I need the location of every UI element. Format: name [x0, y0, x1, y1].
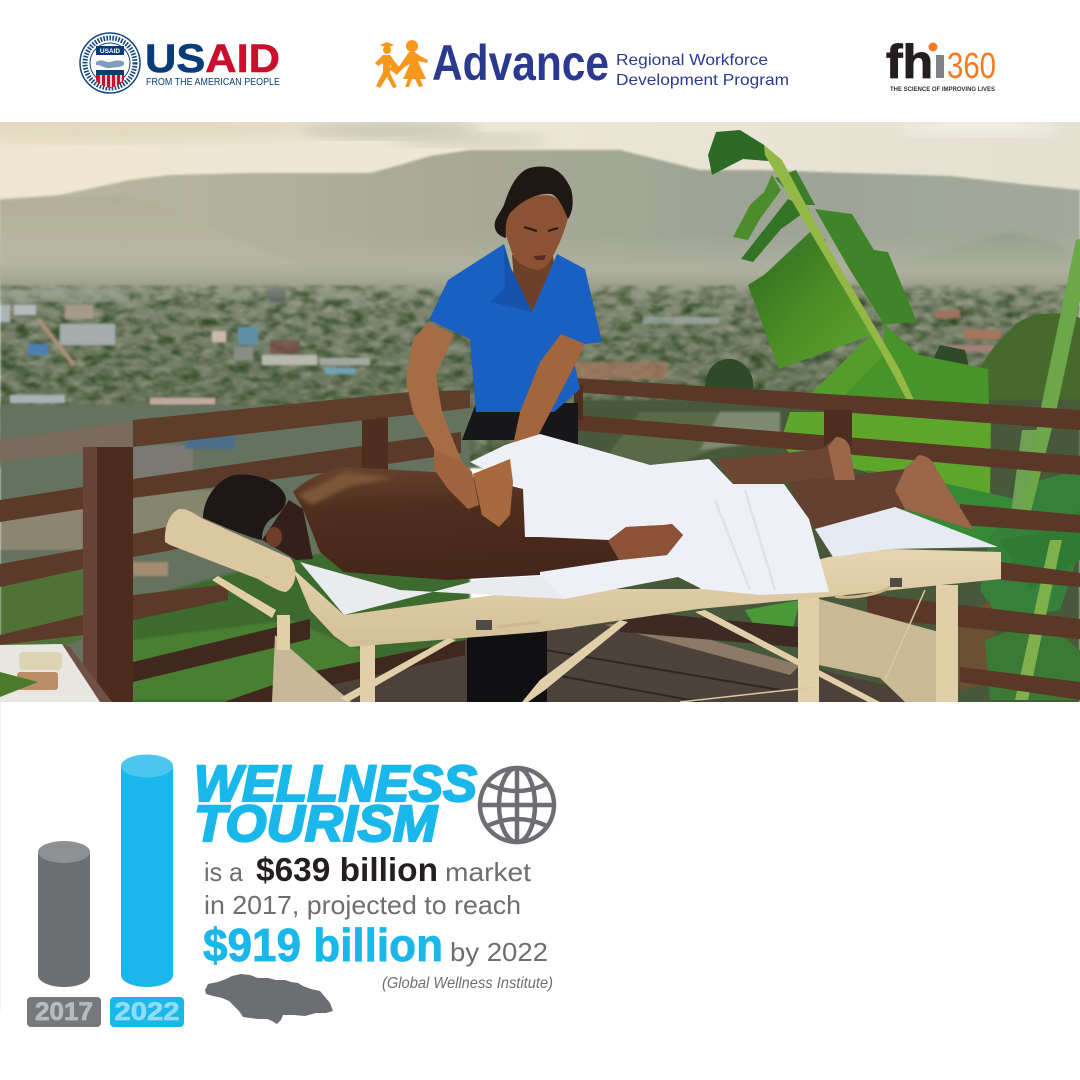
USAID wordmark: USAID [145, 37, 280, 81]
label 2022: 2022 [114, 998, 180, 1026]
table side rail and frame [212, 549, 1001, 702]
face [505, 195, 568, 270]
client head [203, 475, 313, 560]
orange dot [928, 42, 938, 52]
therapist left arm [406, 322, 473, 476]
gray i stem [936, 55, 944, 78]
line 1: $639 billion [256, 851, 438, 888]
source: (Global Wellness Institute) [382, 975, 553, 992]
line 1 [204, 851, 532, 888]
trousers [462, 403, 578, 445]
client torso and arm [293, 467, 683, 580]
USAID tagline: FROM THE AMERICAN PEOPLE [146, 77, 280, 88]
near left mountain [0, 197, 80, 251]
fhi tagline: THE SCIENCE OF IMPROVING LIVES [890, 86, 996, 93]
icon: globe [480, 768, 554, 842]
face cradle [165, 509, 296, 592]
bar chart: 2017 vs 2022 [27, 754, 184, 1027]
therapist right arm [473, 334, 585, 486]
360 numerals: 360 [947, 45, 996, 86]
draped white towel [470, 434, 829, 599]
logo: fhi360 [886, 35, 996, 93]
lower banana foliage [745, 239, 1080, 700]
table body [293, 549, 1001, 647]
side table with soap [0, 644, 112, 702]
table handles [497, 583, 895, 627]
photo: massage on terrace overlooking city [0, 114, 1080, 705]
header logos [80, 33, 996, 93]
line 3: $919 billion [203, 919, 443, 971]
fhi letters: fh [886, 35, 933, 88]
bar 2017 [38, 841, 90, 987]
logo: Advance [375, 35, 789, 91]
USAID seal [80, 33, 140, 93]
line 1: market [445, 857, 532, 887]
heading: wellness tourism: WELLNESS [194, 755, 477, 812]
banana leaf [708, 130, 989, 407]
ropes [680, 590, 925, 702]
hair [495, 167, 573, 238]
terrace deck [224, 620, 960, 702]
line 1: is a [204, 857, 244, 887]
bar 2022 [121, 754, 173, 987]
neck [512, 254, 554, 312]
therapist hands on back [434, 449, 513, 527]
program name [616, 52, 789, 89]
panel right [819, 599, 939, 702]
foreground backdrop [0, 400, 1080, 705]
trees right [705, 313, 1080, 410]
shirt collar [490, 244, 532, 312]
panel left [272, 635, 351, 702]
distant haze [0, 247, 1073, 298]
bottom stat panel [0, 702, 554, 1027]
program name: Regional Workforce [616, 52, 768, 69]
blue shirt [429, 244, 602, 412]
logo: USAID [80, 33, 280, 93]
USAID seal: USAID [100, 48, 120, 55]
program name: Development Program [616, 72, 789, 89]
city [0, 268, 1080, 468]
lower towel under torso [300, 562, 564, 615]
label 2017: 2017 [35, 998, 93, 1026]
line 3: by 2022 [450, 937, 548, 967]
icon: two students walking [375, 40, 428, 88]
Advance wordmark: Advance [432, 35, 609, 91]
far mountains [0, 150, 1080, 300]
therapist [406, 166, 602, 486]
near right hill [968, 234, 1060, 250]
therapist legs below table [467, 630, 547, 702]
towel fold shading [715, 490, 775, 590]
market text [203, 851, 548, 971]
heading: wellness tourism [194, 755, 477, 852]
eye and lips [524, 227, 558, 231]
sky [0, 114, 1080, 302]
client legs [716, 437, 974, 530]
icon: Jamaica map [205, 974, 333, 1024]
heading: wellness tourism: TOURISM [194, 795, 439, 852]
left edge line [0, 702, 1, 1010]
line 2: in 2017, projected to reach [204, 890, 521, 920]
legs and braces [212, 576, 958, 702]
table latches [476, 578, 902, 630]
far railing right [574, 378, 1080, 700]
railing left [0, 390, 470, 702]
foot-end towel [815, 507, 998, 557]
